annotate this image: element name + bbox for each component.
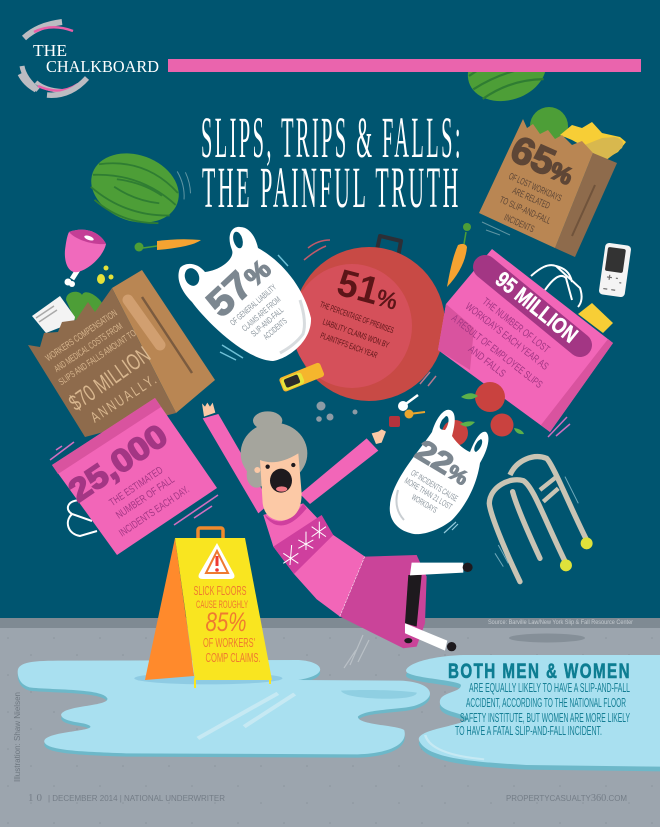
puddle callout: both men and women — [448, 660, 631, 738]
white bag: 57% — [178, 227, 311, 361]
watermelon left — [81, 142, 197, 237]
lettuce in left bag — [66, 292, 102, 320]
white bag: 57%: 57% — [199, 247, 279, 325]
food crumbs — [97, 266, 114, 284]
white bag: 57%: CLAIMS ARE FROM — [240, 294, 282, 333]
puddles — [18, 655, 660, 771]
wet floor sign — [145, 528, 272, 688]
wet floor sign: 85% — [206, 607, 246, 637]
left bag text: AND MEDICAL COSTS FROM — [52, 321, 125, 375]
floor — [0, 618, 660, 827]
footer left: 10 — [28, 792, 42, 804]
wet floor sign: OF WORKERS' — [203, 635, 255, 650]
paper bag: 65%: INCIDENTS — [502, 212, 536, 235]
warning icon — [198, 543, 234, 579]
motion lines under grandma — [344, 635, 369, 668]
header bar — [168, 59, 641, 72]
legs — [405, 575, 422, 627]
white bag: 57%: ACCIDENTS — [261, 316, 289, 342]
mouth — [270, 469, 292, 493]
collar — [263, 503, 307, 526]
footer right: PROPERTYCASUALTY360.COM — [506, 792, 627, 804]
white bag: 22%: 22% — [410, 434, 476, 492]
white bag: 22%: OF INCIDENTS CAUSE — [409, 467, 460, 503]
white bag: 22% — [390, 410, 488, 534]
torso — [263, 503, 365, 617]
source note: Source: Barville Law/New York Slip & Fall Resource Center — [488, 620, 633, 626]
wet floor sign: CAUSE ROUGHLY — [196, 599, 248, 611]
wet floor sign: COMP CLAIMS. — [206, 650, 260, 665]
face — [260, 453, 302, 521]
carrot right — [447, 223, 471, 287]
carrot left — [134, 239, 201, 252]
sweater pattern — [273, 515, 333, 574]
left bag text: $70 MILLION — [64, 341, 155, 416]
yellow phone — [279, 362, 325, 392]
left bag text: SLIPS AND FALLS AMOUNT TO — [57, 328, 138, 388]
pink bag: 95 million: AND FALLS — [466, 343, 508, 380]
white bag: 22%: WORKDAYS — [410, 492, 439, 515]
left bag text: ANNUALLY. — [88, 370, 161, 426]
paper bag: 65%: 65% — [504, 128, 582, 194]
paper bag: 65%: TO SLIP-AND-FALL — [498, 195, 552, 227]
pink bag: 25,000: 25,000 — [62, 417, 174, 509]
lettuce and bananas — [530, 107, 568, 145]
pink bag: 25,000: INCIDENTS EACH DAY. — [117, 484, 192, 539]
shopping bag handles left — [68, 500, 97, 536]
pink bag: 95 million: THE NUMBER OF LOST — [480, 296, 552, 356]
pink bag: 95 million: 95 MILLION — [491, 267, 583, 348]
walker — [489, 457, 593, 582]
logo: The Chalkboard: CHALKBOARD — [46, 57, 159, 76]
white bag: 57%: OF GENERAL LIABILITY — [228, 282, 278, 328]
paper bag: 65% — [479, 107, 626, 257]
pink bag: 25,000: THE ESTIMATED — [107, 464, 166, 509]
suitcase: 51%: LIABILITY CLAIMS WON BY — [321, 317, 391, 350]
title — [201, 105, 463, 220]
apples — [442, 382, 524, 446]
arms — [203, 414, 378, 513]
hair — [253, 411, 282, 430]
bag handles and yellow box — [531, 265, 613, 333]
pink bag: 95 million — [438, 249, 613, 437]
skirt — [340, 555, 427, 648]
left bag text — [44, 308, 161, 426]
wet floor sign: SLICK FLOORS — [194, 583, 247, 598]
suitcase: 51%: PLAINTIFFS EACH YEAR — [319, 330, 379, 360]
watermelon top right — [468, 72, 545, 102]
left bag text: WORKERS COMPENSATION — [44, 308, 120, 364]
grandma falling — [202, 403, 473, 651]
paper bag: 65%: OF LOST WORKDAYS — [507, 171, 563, 204]
white bag: 22%: MORE THAN 21 LOST — [403, 475, 454, 512]
pink bag: 95 million: A RESULT OF EMPLOYEE SLIPS — [449, 312, 545, 391]
pink bag: 25,000 — [50, 398, 218, 555]
ham — [64, 230, 106, 287]
paper bag: 65%: ARE RELATED — [511, 186, 552, 212]
footer left: | DECEMBER 2014 | NATIONAL UNDERWRITER — [48, 793, 225, 803]
pink bag: 25,000: NUMBER OF FALL — [114, 473, 177, 521]
suitcase: 51% — [292, 236, 445, 401]
logo: The Chalkboard: THE — [33, 41, 67, 60]
media player — [599, 242, 631, 298]
paper bag: workers compensation — [28, 270, 215, 437]
pebbles — [316, 402, 358, 422]
logo: The Chalkboard — [20, 22, 159, 95]
illustration credit: Illustration: Shaw Nielsen — [12, 692, 22, 782]
suitcase: 51%: 51% — [333, 262, 403, 319]
paper in left bag — [32, 296, 75, 333]
white bag: 57%: SLIP-AND-FALL — [249, 305, 286, 339]
suitcase: 51%: THE PERCENTAGE OF PREMISES — [319, 299, 396, 335]
keys — [389, 395, 425, 427]
pink bag: 95 million: WORKDAYS EACH YEAR AS — [463, 301, 551, 373]
